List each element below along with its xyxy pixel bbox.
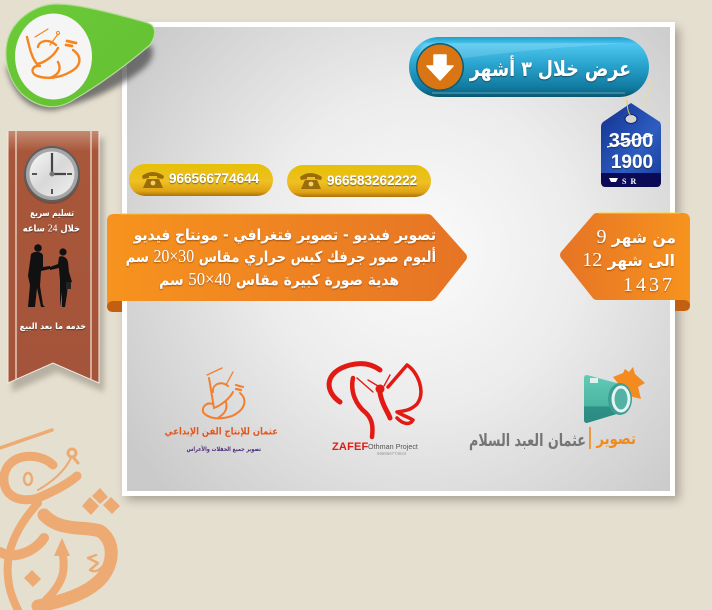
icon: sun — [613, 367, 645, 399]
text: date range — [582, 226, 676, 296]
text: services list: تصوير فيديو - تصوير فتغرافي - مونتاج فيديو — [133, 228, 436, 244]
text: phone number: 966583262222 — [327, 173, 417, 188]
text: date range: الى شهر 12 — [582, 249, 675, 271]
text: production subtitle: تصوير جميع الحفلات والأعراس — [187, 444, 261, 453]
text: within 24 hours: خلال 24 ساعه — [23, 223, 80, 235]
icon: down arrow — [416, 43, 464, 91]
text: currency: S R — [622, 177, 637, 186]
text: small phone number: 966566774644 — [377, 451, 407, 456]
text: production name: عثمان للإنتاج الفن الإبداعي — [165, 427, 278, 438]
icon: clock — [24, 146, 80, 204]
text: photography label: تصوير — [595, 430, 636, 448]
text: date range: 1437 — [623, 274, 675, 296]
icon: handshake silhouettes — [28, 244, 72, 307]
text: services list: هدية صورة كبيرة مقاس 40×50 سم — [159, 269, 399, 289]
banner: services — [107, 214, 467, 312]
text: services list: ألبوم صور جرفك كبس حراري مقاس 30×20 سم — [126, 246, 436, 267]
phone pill: left — [129, 164, 273, 196]
button: three-month offer — [409, 37, 649, 97]
panel: side ribbon — [8, 131, 104, 392]
text: services list — [126, 228, 436, 289]
text: photographer name: عثمان العبد السلام — [469, 430, 586, 451]
calligraphy diamonds — [24, 488, 120, 587]
icon: telephone — [142, 172, 164, 188]
price tag — [601, 78, 661, 187]
logo: ZAFEF butterfly — [329, 364, 421, 456]
text: Othman Project: Othman Project — [368, 442, 418, 451]
icon: camera — [584, 375, 620, 423]
text: new price: 1900 — [611, 152, 653, 173]
badge: green logo tab — [6, 4, 155, 110]
banner: date range — [560, 213, 690, 311]
text: date range: من شهر 9 — [597, 226, 676, 248]
icon: telephone — [300, 173, 322, 189]
panel: main card — [122, 22, 679, 500]
text: old price: 3500 — [609, 130, 653, 152]
text: after-sales service: خدمه ما بعد البيع — [20, 321, 86, 332]
text: offer label: عرض خلال ٣ أشهر — [469, 55, 631, 81]
logo: photography camera — [469, 367, 645, 451]
icon: logo calligraphy — [27, 29, 79, 78]
background calligraphy decoration — [0, 430, 111, 610]
text: fast delivery: تسليم سريع — [30, 207, 74, 219]
logo: Othman art production — [165, 368, 278, 453]
text: phone number: 966566774644 — [169, 171, 260, 186]
text: ZAFEF: ZAFEF — [332, 441, 369, 453]
phone pill: right — [287, 165, 431, 197]
